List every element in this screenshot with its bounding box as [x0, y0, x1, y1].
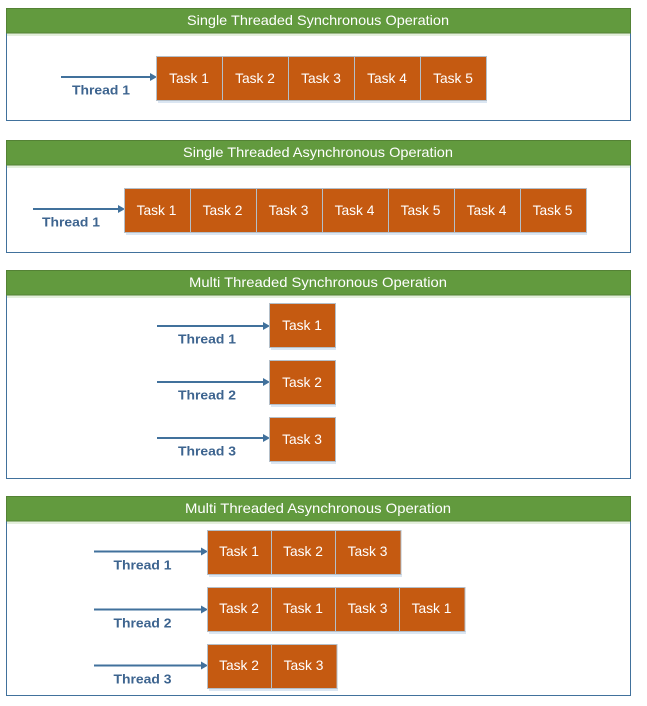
panel: multi threaded synchronous [6, 270, 630, 478]
arrow: thread 3 [157, 434, 270, 442]
task row: thread 3: Task 3 [284, 658, 324, 673]
task row: thread 2: Task 3 [348, 601, 388, 616]
task row: thread 2: Task 1 [283, 601, 323, 616]
heading: single threaded asynchronous [6, 140, 630, 165]
arrow: thread 1 [157, 322, 270, 330]
task: task 2 [270, 360, 336, 407]
arrow: thread 3 [94, 662, 208, 670]
task row: thread 2: Task 1 [412, 601, 451, 616]
task row: thread 1: Task 3 [348, 544, 388, 559]
label: thread 1: Thread 1 [114, 558, 172, 572]
label: thread 3: Thread 3 [178, 444, 236, 458]
heading: single threaded synchronous [6, 8, 630, 33]
task: task 1 [270, 304, 336, 350]
arrow: thread 1 [33, 205, 125, 213]
task: task 3 [270, 418, 336, 464]
task row [124, 188, 587, 235]
task row: Task 2 [235, 71, 275, 86]
heading: single threaded asynchronous: Single Threaded Asynchronous Operation [183, 144, 453, 160]
task row: Task 4 [367, 71, 407, 86]
label: thread 1: Thread 1 [178, 332, 236, 346]
task row: thread 3: Task 2 [219, 658, 259, 673]
task row: Task 5 [533, 203, 573, 218]
label: thread 2: Thread 2 [178, 388, 236, 402]
task row: Task 4 [335, 203, 375, 218]
task: task 2: Task 2 [282, 375, 322, 390]
heading: multi threaded asynchronous: Multi Threaded Asynchronous Operation [185, 500, 451, 516]
panel: single threaded synchronous [6, 8, 630, 120]
label: thread 1: Thread 1 [72, 82, 130, 98]
task row: Task 5 [433, 71, 473, 86]
heading: multi threaded asynchronous [6, 496, 630, 521]
task row: Task 3 [301, 71, 341, 86]
task row: Task 2 [203, 203, 242, 218]
task row: thread 1: Task 2 [283, 544, 323, 559]
task row: thread 2 [208, 588, 466, 634]
task row: thread 1: Task 1 [219, 544, 259, 559]
heading: multi threaded synchronous [6, 270, 630, 295]
label: thread 3: Thread 3 [114, 672, 172, 686]
task row: Task 3 [269, 203, 309, 218]
heading: multi threaded synchronous: Multi Threaded Synchronous Operation [189, 274, 447, 290]
label: thread 1: Thread 1 [42, 214, 100, 230]
arrow: thread 2 [94, 606, 208, 614]
arrow: thread 1 [61, 73, 157, 81]
task row: Task 5 [401, 203, 441, 218]
panel: single threaded asynchronous [6, 140, 630, 252]
arrow: thread 2 [157, 378, 270, 386]
task row: Task 1 [169, 71, 209, 86]
task: task 1: Task 1 [282, 318, 322, 333]
task row: Task 1 [137, 203, 176, 218]
task row: thread 2: Task 2 [219, 601, 259, 616]
arrow: thread 1 [94, 548, 208, 556]
task row: thread 3 [208, 644, 338, 691]
heading: single threaded synchronous: Single Threaded Synchronous Operation [187, 12, 449, 28]
task row: Task 4 [467, 203, 507, 218]
label: thread 2: Thread 2 [114, 616, 172, 630]
panel: multi threaded asynchronous [6, 496, 630, 696]
task row: thread 1 [208, 530, 402, 577]
task row [156, 56, 487, 103]
task: task 3: Task 3 [282, 432, 322, 447]
